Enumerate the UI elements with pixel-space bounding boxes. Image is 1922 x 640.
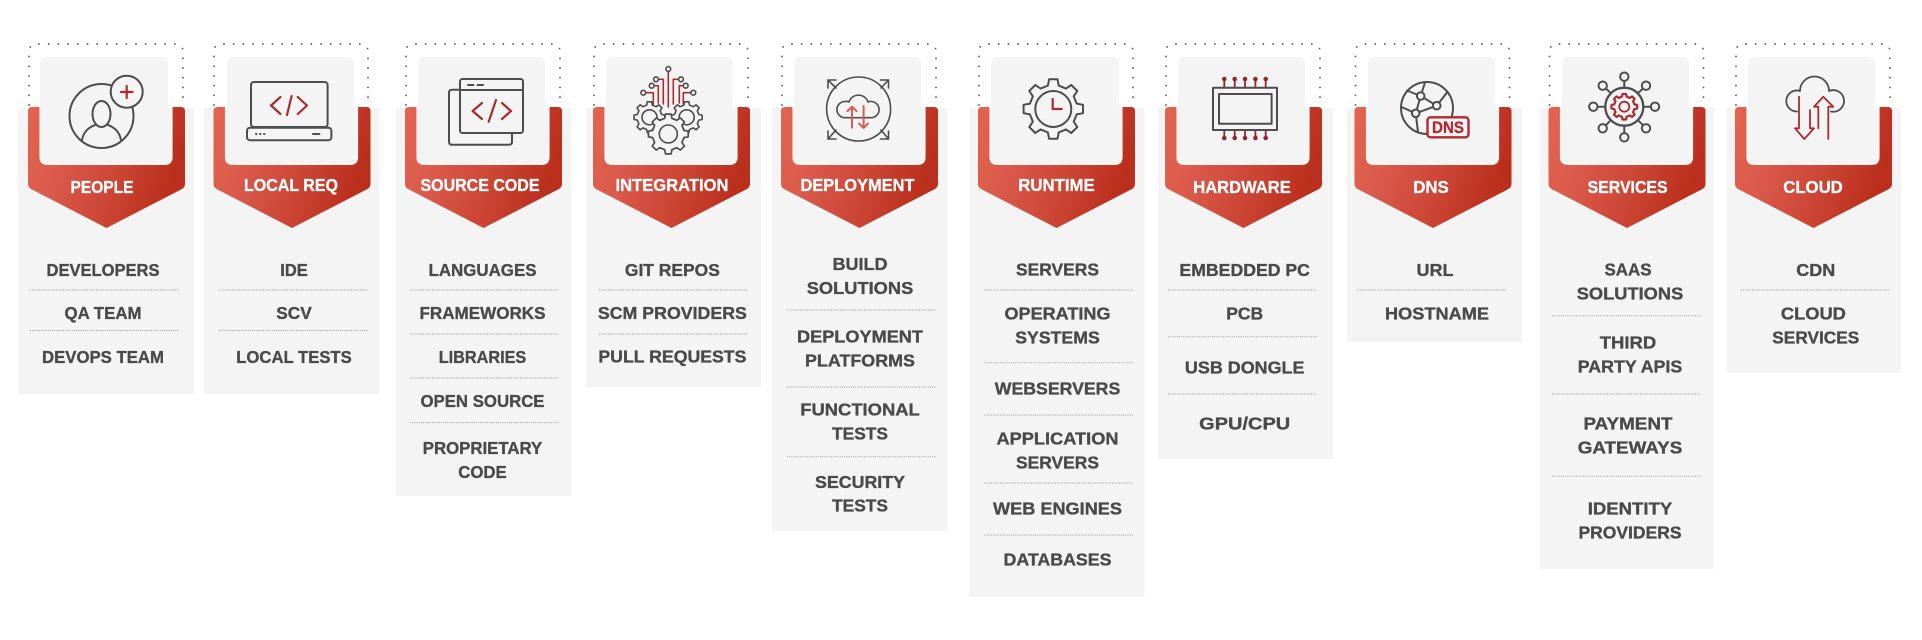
banner: integration bbox=[593, 107, 750, 228]
panel: local req bbox=[204, 44, 379, 394]
heading: integration: INTEGRATION bbox=[616, 175, 728, 195]
icon: chip bbox=[1213, 77, 1277, 140]
list: deployment: FUNCTIONAL bbox=[800, 400, 920, 420]
list: deployment: SECURITY bbox=[815, 472, 905, 492]
list: source code bbox=[410, 260, 559, 482]
list: deployment: BUILD bbox=[832, 254, 888, 274]
list: cloud bbox=[1741, 260, 1890, 348]
list: source code: OPEN SOURCE bbox=[420, 391, 544, 411]
panel: source code bbox=[396, 44, 571, 496]
icon: gears with circuit traces bbox=[634, 67, 702, 154]
panel: dns bbox=[1347, 44, 1522, 342]
banner: runtime bbox=[978, 107, 1135, 228]
banner: deployment bbox=[781, 107, 938, 228]
list: dns: URL bbox=[1416, 260, 1454, 280]
banner: services bbox=[1548, 107, 1706, 228]
banner: hardware bbox=[1165, 107, 1322, 228]
list: services: SAAS bbox=[1604, 260, 1652, 280]
panel: deployment bbox=[772, 44, 947, 531]
list: deployment: PLATFORMS bbox=[805, 351, 915, 371]
list: runtime: APPLICATION bbox=[996, 429, 1118, 449]
list: services: PARTY APIS bbox=[1578, 357, 1682, 377]
list: hardware: PCB bbox=[1226, 304, 1263, 324]
list: integration: GIT REPOS bbox=[625, 260, 720, 280]
panel: services bbox=[1540, 44, 1714, 569]
list: source code: FRAMEWORKS bbox=[420, 303, 546, 323]
list: services: PAYMENT bbox=[1584, 414, 1673, 434]
list: services: GATEWAYS bbox=[1578, 438, 1682, 458]
heading: people: PEOPLE bbox=[70, 177, 134, 197]
list: runtime: SERVERS bbox=[1016, 453, 1099, 473]
list: integration: SCM PROVIDERS bbox=[598, 303, 747, 323]
heading: hardware: HARDWARE bbox=[1193, 177, 1291, 197]
list: dns: HOSTNAME bbox=[1385, 304, 1489, 324]
panel: people bbox=[18, 44, 194, 394]
list: deployment: TESTS bbox=[832, 496, 888, 516]
list: people bbox=[30, 260, 179, 367]
list: runtime: WEBSERVERS bbox=[995, 379, 1120, 399]
banner: local req bbox=[214, 107, 370, 228]
list: services: PROVIDERS bbox=[1578, 523, 1682, 543]
list: runtime: WEB ENGINES bbox=[993, 499, 1122, 519]
list: hardware: USB DONGLE bbox=[1185, 358, 1304, 378]
list: local req: LOCAL TESTS bbox=[236, 347, 352, 367]
list: runtime bbox=[984, 260, 1134, 570]
list: deployment bbox=[787, 254, 936, 516]
list: services: THIRD bbox=[1600, 333, 1656, 353]
list: source code: PROPRIETARY bbox=[423, 438, 543, 458]
icon: gear with clock bbox=[1024, 79, 1083, 139]
heading: services: SERVICES bbox=[1588, 177, 1668, 197]
list: integration bbox=[598, 260, 748, 367]
icon: globe with dns tag: DNS bbox=[1432, 119, 1464, 137]
list: source code: LIBRARIES bbox=[439, 347, 526, 367]
list: people: QA TEAM bbox=[64, 303, 142, 323]
banner: dns bbox=[1354, 107, 1512, 228]
list: deployment: SOLUTIONS bbox=[807, 278, 913, 298]
banner: people bbox=[28, 107, 185, 228]
banner: source code bbox=[405, 107, 562, 228]
list: hardware: EMBEDDED PC bbox=[1179, 260, 1310, 280]
icon: cloud with transfer arrows bbox=[1786, 76, 1844, 139]
list: services bbox=[1552, 260, 1701, 543]
heading: cloud: CLOUD bbox=[1783, 177, 1843, 197]
list: integration: PULL REQUESTS bbox=[598, 347, 746, 367]
list: people: DEVELOPERS bbox=[46, 260, 160, 280]
list: services: IDENTITY bbox=[1588, 499, 1673, 519]
icon: code windows bbox=[449, 79, 523, 145]
list: cloud: CLOUD bbox=[1781, 304, 1846, 324]
panel: integration bbox=[586, 44, 761, 387]
list: runtime: SERVERS bbox=[1016, 260, 1099, 280]
panel: runtime bbox=[970, 44, 1144, 597]
panel: hardware bbox=[1158, 44, 1333, 459]
list: local req: IDE bbox=[280, 260, 308, 280]
heading: source code: SOURCE CODE bbox=[420, 175, 540, 195]
icon: laptop with code bbox=[247, 82, 331, 140]
panel: cloud bbox=[1726, 44, 1901, 373]
heading: dns: DNS bbox=[1413, 177, 1449, 197]
list: source code: CODE bbox=[458, 462, 507, 482]
icon: cloud deployment bbox=[827, 77, 891, 141]
icon: globe with dns tag bbox=[1401, 82, 1468, 137]
list: runtime: DATABASES bbox=[1004, 550, 1112, 570]
list: deployment: TESTS bbox=[832, 424, 888, 444]
heading: deployment: DEPLOYMENT bbox=[800, 175, 915, 195]
list: cloud: CDN bbox=[1796, 260, 1835, 280]
list: local req bbox=[219, 260, 368, 367]
list: hardware bbox=[1168, 260, 1318, 434]
list: cloud: SERVICES bbox=[1772, 328, 1859, 348]
list: runtime: SYSTEMS bbox=[1015, 328, 1100, 348]
banner: cloud bbox=[1735, 107, 1892, 228]
list: source code: LANGUAGES bbox=[428, 260, 536, 280]
heading: local req: LOCAL REQ bbox=[244, 175, 338, 195]
list: people: DEVOPS TEAM bbox=[42, 347, 164, 367]
heading: runtime: RUNTIME bbox=[1018, 175, 1095, 195]
list: services: SOLUTIONS bbox=[1577, 284, 1683, 304]
list: runtime: OPERATING bbox=[1004, 304, 1110, 324]
icon: gear network bbox=[1589, 72, 1659, 142]
list: dns bbox=[1358, 260, 1506, 324]
list: hardware: GPU/CPU bbox=[1199, 414, 1290, 434]
list: deployment: DEPLOYMENT bbox=[797, 327, 923, 347]
list: local req: SCV bbox=[276, 303, 312, 323]
icon: person with plus bbox=[70, 76, 143, 148]
